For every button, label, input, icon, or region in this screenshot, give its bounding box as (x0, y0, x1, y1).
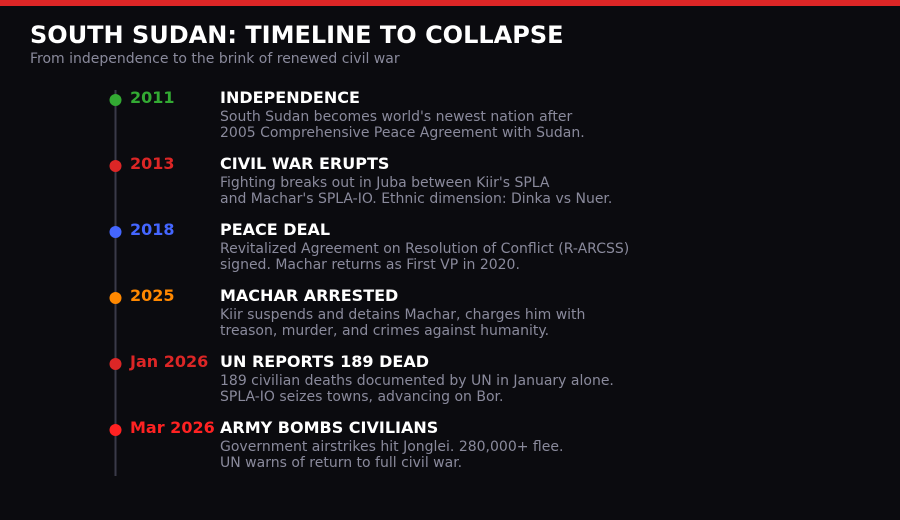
event: 2013: and Machar's SPLA-IO. Ethnic dimension: Dinka vs Nuer. (220, 191, 612, 207)
event: 2011: 2011 (130, 88, 175, 107)
event: Mar 2026 (110, 418, 563, 471)
title: SOUTH SUDAN: TIMELINE TO COLLAPSE (30, 21, 564, 49)
subtitle: From independence to the brink of renewed civil war (30, 51, 400, 67)
event: 2013: 2013 (130, 154, 175, 173)
event: 2011 (110, 88, 585, 141)
event: 2018: Revitalized Agreement on Resolution of Conflict (R-ARCSS) (220, 241, 629, 257)
event: Jan 2026 (110, 352, 614, 405)
event: 2018: signed. Machar returns as First VP in 2020. (220, 257, 520, 273)
timeline line (114, 90, 116, 476)
event: 2025: MACHAR ARRESTED (220, 286, 398, 305)
event: Jan 2026: 189 civilian deaths documented by UN in January alone. (220, 373, 614, 389)
event: Mar 2026: ARMY BOMBS CIVILIANS (220, 418, 438, 437)
top accent bar (0, 0, 900, 6)
event: Jan 2026: UN REPORTS 189 DEAD (220, 352, 429, 371)
event: Jan 2026: Jan 2026 (129, 352, 208, 371)
event: Mar 2026: Mar 2026 (130, 418, 215, 437)
event: 2011: INDEPENDENCE (220, 88, 360, 107)
event: Jan 2026: SPLA-IO seizes towns, advancing on Bor. (220, 389, 503, 405)
event: 2025 (110, 286, 585, 339)
event: 2025: treason, murder, and crimes against humanity. (220, 323, 549, 339)
event: 2018: PEACE DEAL (220, 220, 330, 239)
event: 2013 (110, 154, 612, 207)
event: 2025: 2025 (130, 286, 175, 305)
event: 2013: CIVIL WAR ERUPTS (220, 154, 389, 173)
event: 2018 (110, 220, 629, 273)
event: Mar 2026: Government airstrikes hit Jonglei. 280,000+ flee. (220, 439, 563, 455)
event: 2011: South Sudan becomes world's newest nation after (220, 109, 572, 125)
event: 2018: 2018 (130, 220, 175, 239)
event: 2025: Kiir suspends and detains Machar, charges him with (220, 307, 585, 323)
event: 2011: 2005 Comprehensive Peace Agreement with Sudan. (220, 125, 585, 141)
event: 2013: Fighting breaks out in Juba between Kiir's SPLA (220, 175, 550, 191)
event: Mar 2026: UN warns of return to full civil war. (220, 455, 462, 471)
